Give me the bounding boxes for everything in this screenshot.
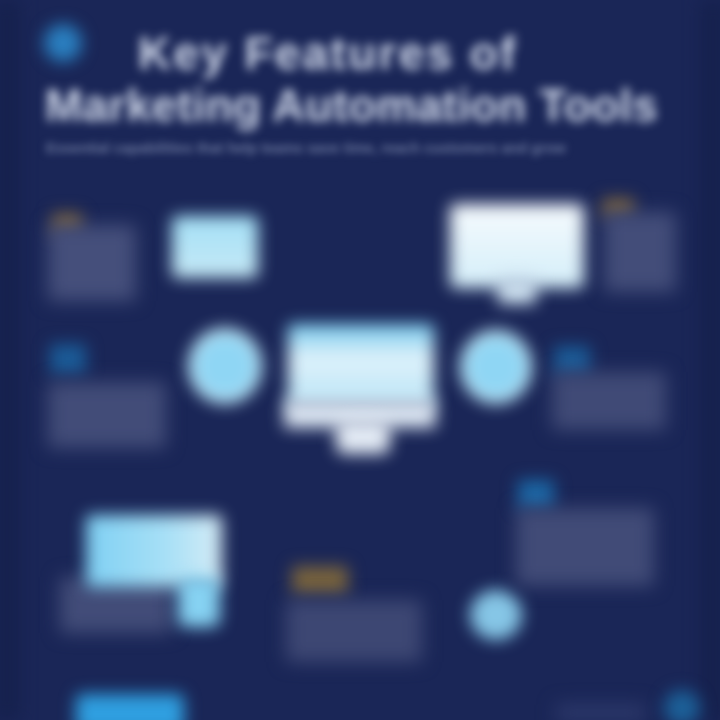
icon: top left screen [172,216,258,278]
text: footer [556,704,646,720]
panel: top left text [40,204,143,308]
text block [286,600,422,662]
icon: middle left circle [188,328,262,404]
icon: top right speech card [437,191,596,316]
icon: bottom right circle [470,590,522,640]
tag: orange heading [602,198,634,218]
panel: middle right text [545,338,672,436]
title: Key Features of [138,27,518,79]
browser corner [178,577,220,627]
panel: top right text [594,188,684,299]
icon: central monitor [272,312,449,467]
icon: bottom left browser [53,502,235,640]
icon: middle right circle [460,330,532,404]
tag: blue heading [50,344,86,374]
text block [552,372,666,430]
browser window [86,515,222,587]
text block [60,577,172,633]
title: Marketing Automation Tools [45,80,658,131]
tag: orange heading [292,566,348,594]
monitor screen [288,324,434,408]
tag: blue heading [554,346,590,376]
tag: orange heading [52,213,82,235]
panel: middle left text [41,336,173,455]
text block [48,382,166,448]
icon: title badge [44,24,82,62]
panel: bottom right text [508,470,661,593]
text block [604,212,676,292]
subtitle: Essential capabilities that help teams save time, reach customers and grow [46,141,566,157]
icon: bottom right badge [664,690,700,720]
card pointer [498,276,536,304]
text block [48,225,136,301]
tag: blue heading [518,480,554,510]
title [40,27,662,138]
button: bottom left [76,694,184,720]
card body [450,204,584,288]
text block [516,508,654,586]
monitor stand [336,420,390,454]
panel: bottom centre text [280,556,428,668]
monitor base [284,400,436,428]
